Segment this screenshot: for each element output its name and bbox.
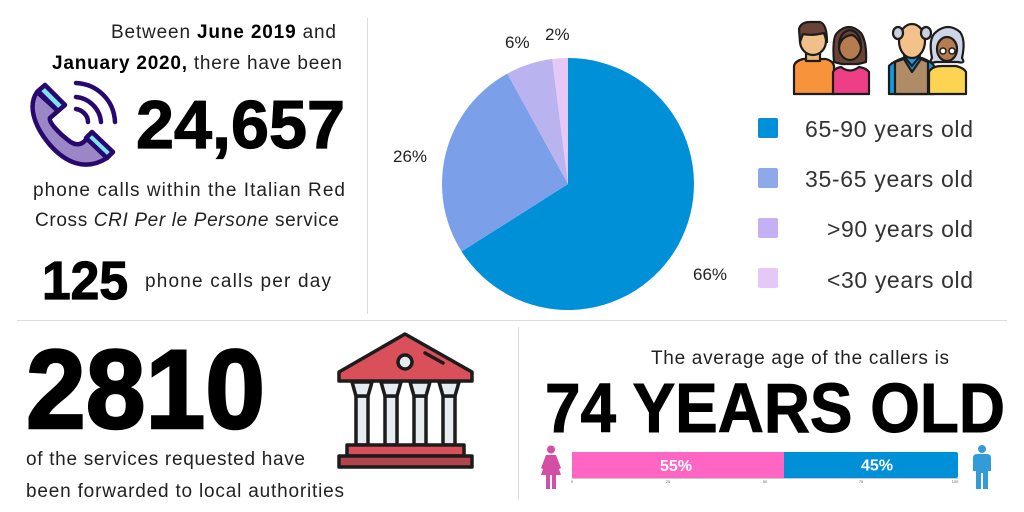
gender bar chart <box>571 452 959 484</box>
forwarded text: of the services requested have <box>26 449 305 470</box>
description text: phone calls within the Italian Red <box>33 180 345 201</box>
pie chart: 6% <box>505 33 530 52</box>
big number: calls: 24,657 <box>136 87 345 163</box>
icon: institution building <box>339 334 472 467</box>
pie chart <box>393 25 727 310</box>
gender bar chart: 75 <box>859 479 864 484</box>
gender bar chart: 55% <box>660 458 692 475</box>
legend: 65-90 years old <box>805 116 973 142</box>
average age text: The average age of the callers is <box>651 348 949 369</box>
calls per day: phone calls per day <box>145 271 332 292</box>
calls per day <box>42 251 332 311</box>
icon: young couple <box>794 22 869 94</box>
gender bar chart: 45% <box>861 458 893 474</box>
forwarded text <box>26 449 344 502</box>
pie chart: 2% <box>545 25 570 44</box>
gender bar chart: 100 <box>952 479 959 484</box>
legend: <30 years old <box>827 267 973 293</box>
intro text: January 2020, there have been <box>52 53 342 74</box>
icon: elderly couple <box>889 24 966 94</box>
legend: >90 years old <box>827 216 973 242</box>
legend <box>758 116 973 293</box>
description text: Cross CRI Per le Persone service <box>35 210 339 231</box>
forwarded text: been forwarded to local authorities <box>26 481 344 502</box>
calls per day: 125 <box>42 251 128 311</box>
intro text: Between June 2019 and <box>111 22 336 43</box>
pie chart: 26% <box>393 147 427 166</box>
gender bar chart: 25 <box>666 479 671 484</box>
intro text <box>52 22 342 74</box>
description text <box>33 180 345 231</box>
gender bar chart: 0 <box>571 479 574 484</box>
icon: phone <box>33 83 115 165</box>
gender bar chart: 50 <box>763 479 768 484</box>
icon: male <box>973 445 991 489</box>
pie chart: 66% <box>693 265 727 284</box>
big number: forwarded services: 2810 <box>26 327 265 452</box>
icon: female <box>541 446 561 489</box>
legend: 35-65 years old <box>805 166 973 192</box>
